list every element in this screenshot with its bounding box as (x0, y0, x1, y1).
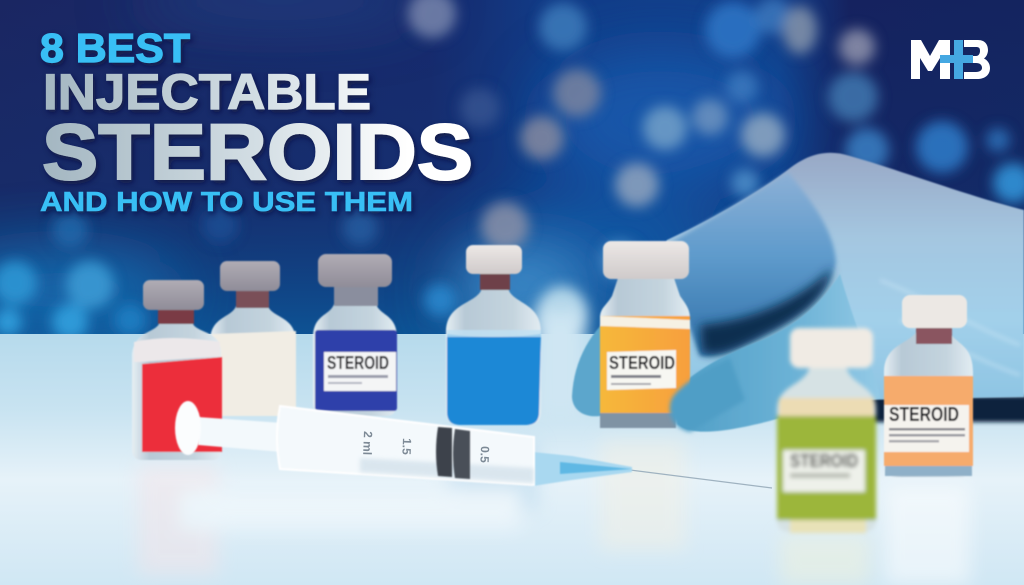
soft crease shadow (700, 268, 832, 354)
plunger flange (175, 401, 201, 455)
barrel scale mark: 2 ml: 2 ml (360, 431, 375, 455)
vial: white liquid (210, 261, 296, 416)
vial: pale orange label (884, 295, 973, 477)
blurred foreground vial: green label (777, 328, 876, 533)
vial: blue liquid (446, 245, 541, 425)
vial label text: STEROID (609, 352, 675, 373)
blue gloved hand (572, 153, 1024, 432)
tabletop (0, 334, 1024, 585)
title line: and how to use them: AND HOW TO USE THEM (40, 186, 413, 217)
vial label text: STEROID (889, 404, 959, 426)
vial: orange label, held by hand (600, 241, 690, 428)
back of hand (650, 153, 1024, 430)
glove wrinkles (880, 280, 1020, 375)
fingertip overlapping orange vial (670, 358, 745, 432)
dark shadow under gloved hand (850, 396, 1024, 422)
title line: steroids: STEROIDS (42, 107, 473, 196)
barrel scale mark: 0.5: 0.5 (477, 446, 492, 463)
background: blue bokeh (0, 0, 1024, 340)
vial reflections on table (138, 440, 970, 585)
title line: 8 best: 8 BEST (40, 25, 190, 71)
rubber stopper (436, 427, 452, 477)
vial label text: STEROID (790, 451, 858, 471)
vial: red label (132, 280, 222, 460)
title (40, 25, 473, 217)
logo: M+B (911, 40, 990, 79)
curled index finger (650, 172, 836, 356)
needle (630, 470, 772, 488)
plunger rod (198, 417, 282, 452)
syringe (175, 401, 772, 488)
title line: injectable: INJECTABLE (43, 64, 371, 120)
barrel (277, 406, 534, 485)
vial: purple-blue label (313, 254, 397, 416)
lower barrel shade (360, 458, 534, 483)
thumb behind vial (572, 300, 660, 416)
lower fingertip (669, 274, 880, 432)
barrel scale mark: 1.5: 1.5 (399, 438, 414, 455)
pale glow between vials (535, 310, 585, 420)
vial label text: STEROID (327, 353, 389, 373)
needle hub (533, 452, 632, 486)
